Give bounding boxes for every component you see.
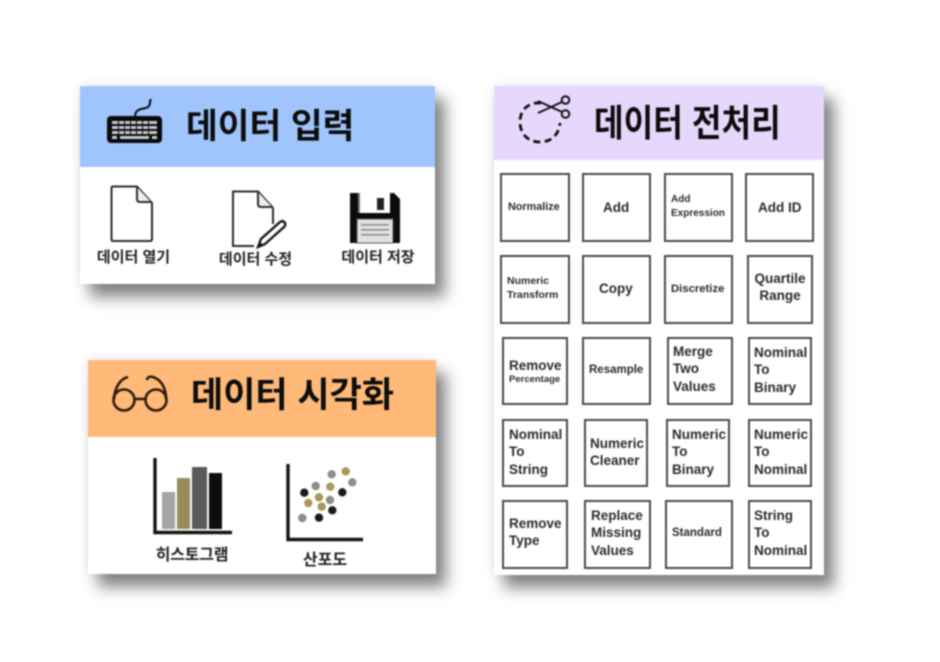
- label: scatter plot: 산포도: [303, 546, 347, 570]
- button: Merge Two Values: Values: [673, 379, 716, 394]
- button: Nominal To Binary: To: [754, 362, 770, 377]
- button: Numeric To Binary: [666, 419, 730, 487]
- icon: floppy disk save: [348, 192, 402, 244]
- button: Numeric To Binary: Numeric: [672, 427, 726, 442]
- button: Resample: Resample: [589, 364, 643, 376]
- button: Numeric Cleaner: Cleaner: [590, 453, 640, 468]
- button: Numeric To Nominal: To: [754, 444, 770, 459]
- panel header: data preprocessing: [494, 86, 824, 160]
- button: Standard: Standard: [672, 527, 722, 539]
- button: Add Expression: Expression: [671, 208, 725, 219]
- button: Nominal To String: To: [509, 444, 524, 459]
- panel: data visualization: [88, 360, 436, 574]
- button: Add: [582, 173, 651, 242]
- button: Remove Type: Type: [509, 533, 540, 548]
- button: Remove Percentage: Remove: [509, 358, 562, 373]
- button: Add ID: [745, 173, 814, 242]
- button: String To Nominal: To: [754, 525, 770, 540]
- button: Numeric Transform: Transform: [507, 288, 558, 300]
- button: Resample: [582, 337, 651, 405]
- heading: data visualization: 데이터 시각화: [191, 367, 394, 418]
- button: Numeric Transform: Numeric: [507, 275, 549, 287]
- button: Numeric To Binary: Binary: [672, 462, 714, 477]
- panel: data preprocessing: [494, 86, 824, 575]
- button: Numeric Cleaner: [584, 419, 648, 487]
- button: Replace Missing Values: Missing: [591, 525, 641, 540]
- button: Add ID: Add ID: [758, 200, 802, 215]
- icon: open file: [110, 184, 154, 243]
- button: Add: Add: [603, 200, 629, 215]
- button: Nominal To Binary: Binary: [754, 380, 796, 395]
- button: Replace Missing Values: [584, 500, 651, 569]
- label: histogram: 히스토그램: [156, 541, 228, 565]
- button: String To Nominal: Nominal: [754, 543, 807, 558]
- button: Numeric To Nominal: Nominal: [754, 462, 807, 477]
- label: open data: 데이터 열기: [97, 246, 170, 267]
- button: Copy: Copy: [599, 281, 633, 296]
- button: Remove Type: Remove: [509, 516, 562, 531]
- histogram icon: [152, 457, 234, 536]
- heading: data preprocessing: 데이터 전처리: [594, 93, 781, 147]
- button: Quartile Range: Quartile: [754, 271, 806, 286]
- icon: scissors cutting dashed circle: [518, 94, 572, 144]
- scatter plot icon: [285, 463, 364, 542]
- button: String To Nominal: String: [754, 508, 793, 523]
- button: String To Nominal: [748, 500, 812, 569]
- button: Copy: [582, 255, 651, 324]
- button: Remove Percentage: Percentage: [509, 374, 560, 385]
- button: Merge Two Values: [667, 337, 733, 405]
- button: Numeric Transform: [500, 255, 570, 324]
- button: Normalize: Normalize: [508, 201, 560, 213]
- button: Discretize: Discretize: [671, 283, 724, 295]
- label: save data: 데이터 저장: [341, 246, 415, 267]
- button: Standard: [665, 500, 733, 569]
- button: Quartile Range: [747, 255, 813, 324]
- button: Remove Percentage: [502, 337, 568, 405]
- icon: edit file: [231, 190, 288, 250]
- button: Remove Type: [502, 500, 568, 569]
- button: Nominal To String: Nominal: [509, 427, 562, 442]
- button: Discretize: [664, 255, 733, 324]
- label: edit data: 데이터 수정: [219, 248, 292, 269]
- panel: data input: [80, 86, 435, 284]
- button: Nominal To Binary: [748, 337, 812, 405]
- button: Replace Missing Values: Values: [591, 543, 634, 558]
- icon: glasses: [111, 374, 169, 413]
- button: Add Expression: [664, 173, 733, 242]
- button: Merge Two Values: Two: [673, 361, 699, 376]
- button: Replace Missing Values: Replace: [591, 508, 643, 523]
- button: Nominal To String: String: [509, 462, 548, 477]
- button: Merge Two Values: Merge: [673, 344, 713, 359]
- button: Numeric To Nominal: Numeric: [754, 427, 808, 442]
- panel header: data visualization: [88, 360, 436, 437]
- button: Nominal To String: [502, 419, 568, 487]
- button: Nominal To Binary: Nominal: [754, 345, 807, 360]
- icon: keyboard: [106, 98, 164, 144]
- button: Quartile Range: Range: [759, 288, 801, 303]
- button: Numeric Cleaner: Numeric: [590, 436, 644, 451]
- button: Normalize: [500, 173, 570, 242]
- button: Numeric To Binary: To: [672, 444, 688, 459]
- panel header: data input: [80, 86, 435, 167]
- heading: data input: 데이터 입력: [186, 98, 354, 148]
- button: Numeric To Nominal: [748, 419, 812, 487]
- button: Add Expression: Add: [671, 194, 690, 205]
